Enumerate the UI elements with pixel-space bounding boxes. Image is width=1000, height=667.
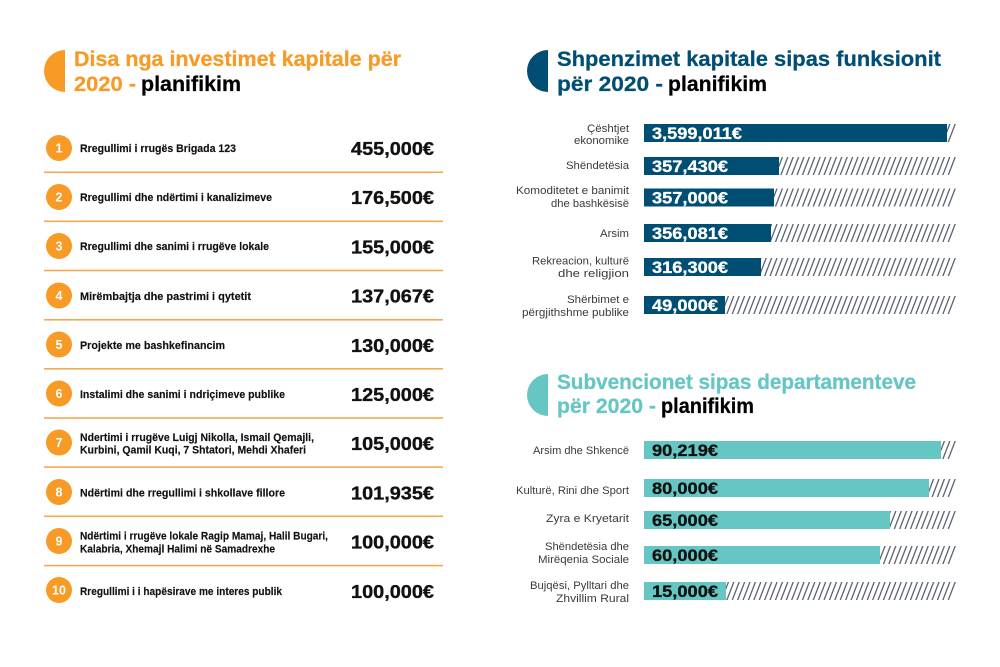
bar: Rekreacion: Rekreacion, kulturë (532, 256, 629, 268)
bar: Shëndetësia dhe Mirëqenia Sociale: 60,000€ (652, 546, 719, 565)
heading: capital investments: Disa nga investimet kapitale për (74, 48, 401, 71)
row 10: Rregullimi i i hapësirave me interes publik (80, 586, 283, 598)
row 3: 155,000€ (351, 236, 434, 257)
icon: orange half circle (44, 50, 65, 92)
row 5: Projekte me bashkefinancim (80, 340, 225, 352)
row 2: 2 (56, 190, 63, 204)
row 5: 130,000€ (351, 335, 434, 356)
row 9: 9 (56, 534, 63, 548)
row 4: 4 (56, 289, 63, 303)
row 9 (44, 528, 443, 566)
bar: Zyra e Kryetarit (546, 511, 952, 530)
bar: Arsim: 356,081€ (652, 224, 729, 243)
row 6 (44, 380, 443, 419)
bar: Çështjet ekonomike: Çështjet (587, 123, 629, 135)
row 8: 101,935€ (351, 482, 434, 503)
row 1 (44, 135, 443, 173)
bar: Shëndetësia: Shëndetësia (566, 160, 630, 172)
row 7: Kurbini, Qamil Kuqi, 7 Shtatori, Mehdi Xhaferi (80, 444, 306, 456)
bar: Rekreacion: dhe religjion (558, 268, 629, 280)
row 8: Ndërtimi dhe rregullimi i shkollave fillore (80, 488, 285, 500)
row 3 (44, 233, 443, 271)
bar: Rekreacion: 316,300€ (652, 258, 729, 277)
bar: Komoditetet e banimit: dhe bashkësisë (551, 198, 629, 210)
bar: Arsim: Arsim (600, 228, 629, 240)
bar: Shëndetësia dhe Mirëqenia Sociale (538, 541, 952, 566)
heading: subsidies by department: për 2020 - (557, 395, 656, 418)
bar: Komoditetet e banimit (516, 185, 952, 210)
row 9: Ndërtimi i rrugëve lokale Ragip Mamaj, Halil Bugari, (80, 530, 328, 542)
bar: Çështjet ekonomike: 3,599,011€ (652, 124, 743, 143)
row 4: Mirëmbajtja dhe pastrimi i qytetit (80, 291, 251, 303)
icon: teal half circle (527, 374, 548, 416)
row 9: 100,000€ (351, 532, 434, 553)
row 1: 1 (56, 142, 63, 156)
row 3: 3 (56, 240, 63, 254)
row 2: 176,500€ (351, 187, 434, 208)
icon: blue half circle (527, 50, 548, 92)
bar: Shëndetësia dhe Mirëqenia Sociale: Mirëqenia Sociale (538, 554, 629, 566)
bar: Kulturë, Rini dhe Sport (516, 479, 952, 498)
bar: Shërbimet publike (522, 294, 952, 319)
bar: Shërbimet publike: përgjithshme publike (522, 307, 629, 319)
bar: Bujqësi, Pylltari dhe Zhvillim Rural: Bujqësi, Pylltari dhe (530, 580, 629, 592)
row 6: Instalimi dhe sanimi i ndriçimeve publike (80, 389, 285, 401)
bar: Shëndetësia dhe Mirëqenia Sociale: Shëndetësia dhe (545, 541, 629, 553)
row 6: 6 (56, 387, 63, 401)
row 4: 137,067€ (351, 286, 434, 307)
row 7: Ndertimi i rrugëve Luigj Nikolla, Ismail Qemajli, (80, 432, 314, 444)
bar: Kulturë, Rini dhe Sport: 80,000€ (652, 479, 719, 498)
row 4 (44, 282, 443, 321)
bar: Çështjet ekonomike (574, 123, 952, 147)
bar: Zyra e Kryetarit: Zyra e Kryetarit (546, 513, 629, 525)
row 3: Rregullimi dhe sanimi i rrugëve lokale (80, 241, 269, 253)
heading: expenditure by function (557, 48, 941, 96)
bar: Bujqësi, Pylltari dhe Zhvillim Rural: Zhvillim Rural (556, 593, 629, 605)
row 7 (44, 430, 443, 468)
bar: Çështjet ekonomike: ekonomike (574, 135, 629, 147)
bar: Arsim dhe Shkencë (533, 441, 952, 460)
row 8: 8 (56, 486, 63, 500)
bar: Shërbimet publike: Shërbimet e (567, 294, 629, 306)
panel: capital investments (44, 48, 443, 603)
heading: capital investments (74, 48, 401, 96)
heading: expenditure by function: planifikim (668, 73, 767, 96)
row 6: 125,000€ (351, 384, 434, 405)
row 7: 7 (56, 436, 63, 450)
bar: Komoditetet e banimit: Komoditetet e banimit (516, 185, 629, 197)
heading: capital investments: planifikim (141, 73, 241, 96)
bar: Shërbimet publike: 49,000€ (652, 296, 719, 315)
bar: Komoditetet e banimit: 357,000€ (652, 188, 729, 208)
row 8 (44, 479, 443, 517)
row 7: 105,000€ (351, 433, 434, 454)
row 10: 10 (52, 584, 66, 598)
row 10 (46, 577, 434, 603)
row 9: Kalabria, Xhemajl Halimi në Samadrexhe (80, 544, 275, 556)
heading: subsidies by department (557, 371, 916, 418)
heading: subsidies by department: Subvencionet sipas departamenteve (557, 371, 916, 394)
bar: Bujqësi, Pylltari dhe Zhvillim Rural (530, 580, 952, 605)
bar: Kulturë, Rini dhe Sport: Kulturë, Rini dhe Sport (516, 485, 629, 497)
row 1: Rregullimi i rrugës Brigada 123 (80, 143, 236, 155)
bar: Shëndetësia (566, 157, 952, 176)
bar: Shëndetësia: 357,430€ (652, 157, 729, 176)
panel: subsidies by department (516, 371, 952, 605)
heading: expenditure by function: Shpenzimet kapitale sipas funksionit (557, 48, 941, 71)
bar: Arsim dhe Shkencë: Arsim dhe Shkencë (533, 445, 629, 457)
row 2 (44, 184, 443, 222)
row 5 (44, 332, 443, 370)
bar: Arsim dhe Shkencë: 90,219€ (652, 441, 719, 460)
bar: Arsim (600, 224, 952, 243)
panel: capital expenditure by function (516, 48, 952, 319)
row 2: Rregullimi dhe ndërtimi i kanalizimeve (80, 192, 272, 204)
heading: subsidies by department: planifikim (661, 395, 754, 418)
heading: expenditure by function: për 2020 - (557, 73, 663, 96)
heading: capital investments: 2020 - (74, 73, 136, 96)
row 10: 100,000€ (351, 581, 434, 602)
row 5: 5 (56, 338, 63, 352)
row 1: 455,000€ (351, 138, 434, 159)
bar: Zyra e Kryetarit: 65,000€ (652, 511, 719, 530)
bar: Rekreacion (532, 256, 952, 280)
bar: Bujqësi, Pylltari dhe Zhvillim Rural: 15,000€ (652, 582, 719, 601)
